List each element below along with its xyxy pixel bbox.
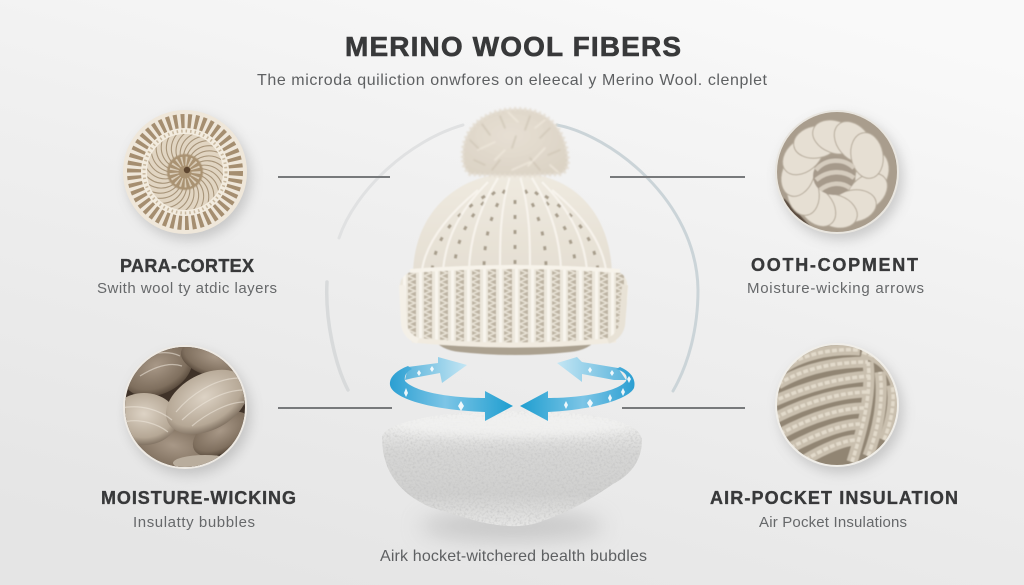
panel: ooth-copment <box>747 110 924 297</box>
decorative arc behind hat <box>327 125 698 391</box>
panel: air-pocket insulation <box>710 343 958 531</box>
hat crown <box>413 175 612 269</box>
hat cuff <box>400 266 628 346</box>
heading: PARA-CORTEX <box>120 256 254 276</box>
icon: rope coil photo <box>775 110 903 240</box>
heading: AIR-POCKET INSULATION <box>710 488 958 508</box>
panel: moisture-wicking <box>101 333 296 531</box>
back left arrow <box>405 357 467 383</box>
bottom caption: Airk hocket-witchered bealth bubdles <box>380 548 647 565</box>
subtitle: The microda quiliction onwfores on eleecal y Merino Wool. clenplet <box>257 72 768 89</box>
back right arrow <box>557 357 626 382</box>
caption: Moisture-wicking arrows <box>747 280 924 297</box>
panel: para-cortex <box>97 110 277 297</box>
illustration: wool stone base <box>382 411 642 541</box>
water droplets <box>404 366 631 411</box>
caption: Swith wool ty atdic layers <box>97 280 277 297</box>
hat underside <box>433 338 597 355</box>
illustration: knit beanie <box>400 109 628 355</box>
pom-pom <box>463 109 568 176</box>
heading: OOTH-COPMENT <box>751 255 918 275</box>
connector lines <box>278 177 745 408</box>
front right arrow <box>520 367 634 421</box>
icon: moisture-wicking arrows <box>390 357 634 421</box>
caption: Air Pocket Insulations <box>759 514 907 531</box>
icon: yarn ball photo <box>772 343 903 473</box>
heading: MOISTURE-WICKING <box>101 488 296 508</box>
title: MERINO WOOL FIBERS <box>345 31 681 62</box>
icon: thick yarn photo <box>123 347 255 479</box>
icon: coiled wool disc <box>123 110 251 240</box>
front left arrow <box>390 366 513 421</box>
caption: Insulatty bubbles <box>133 514 255 531</box>
